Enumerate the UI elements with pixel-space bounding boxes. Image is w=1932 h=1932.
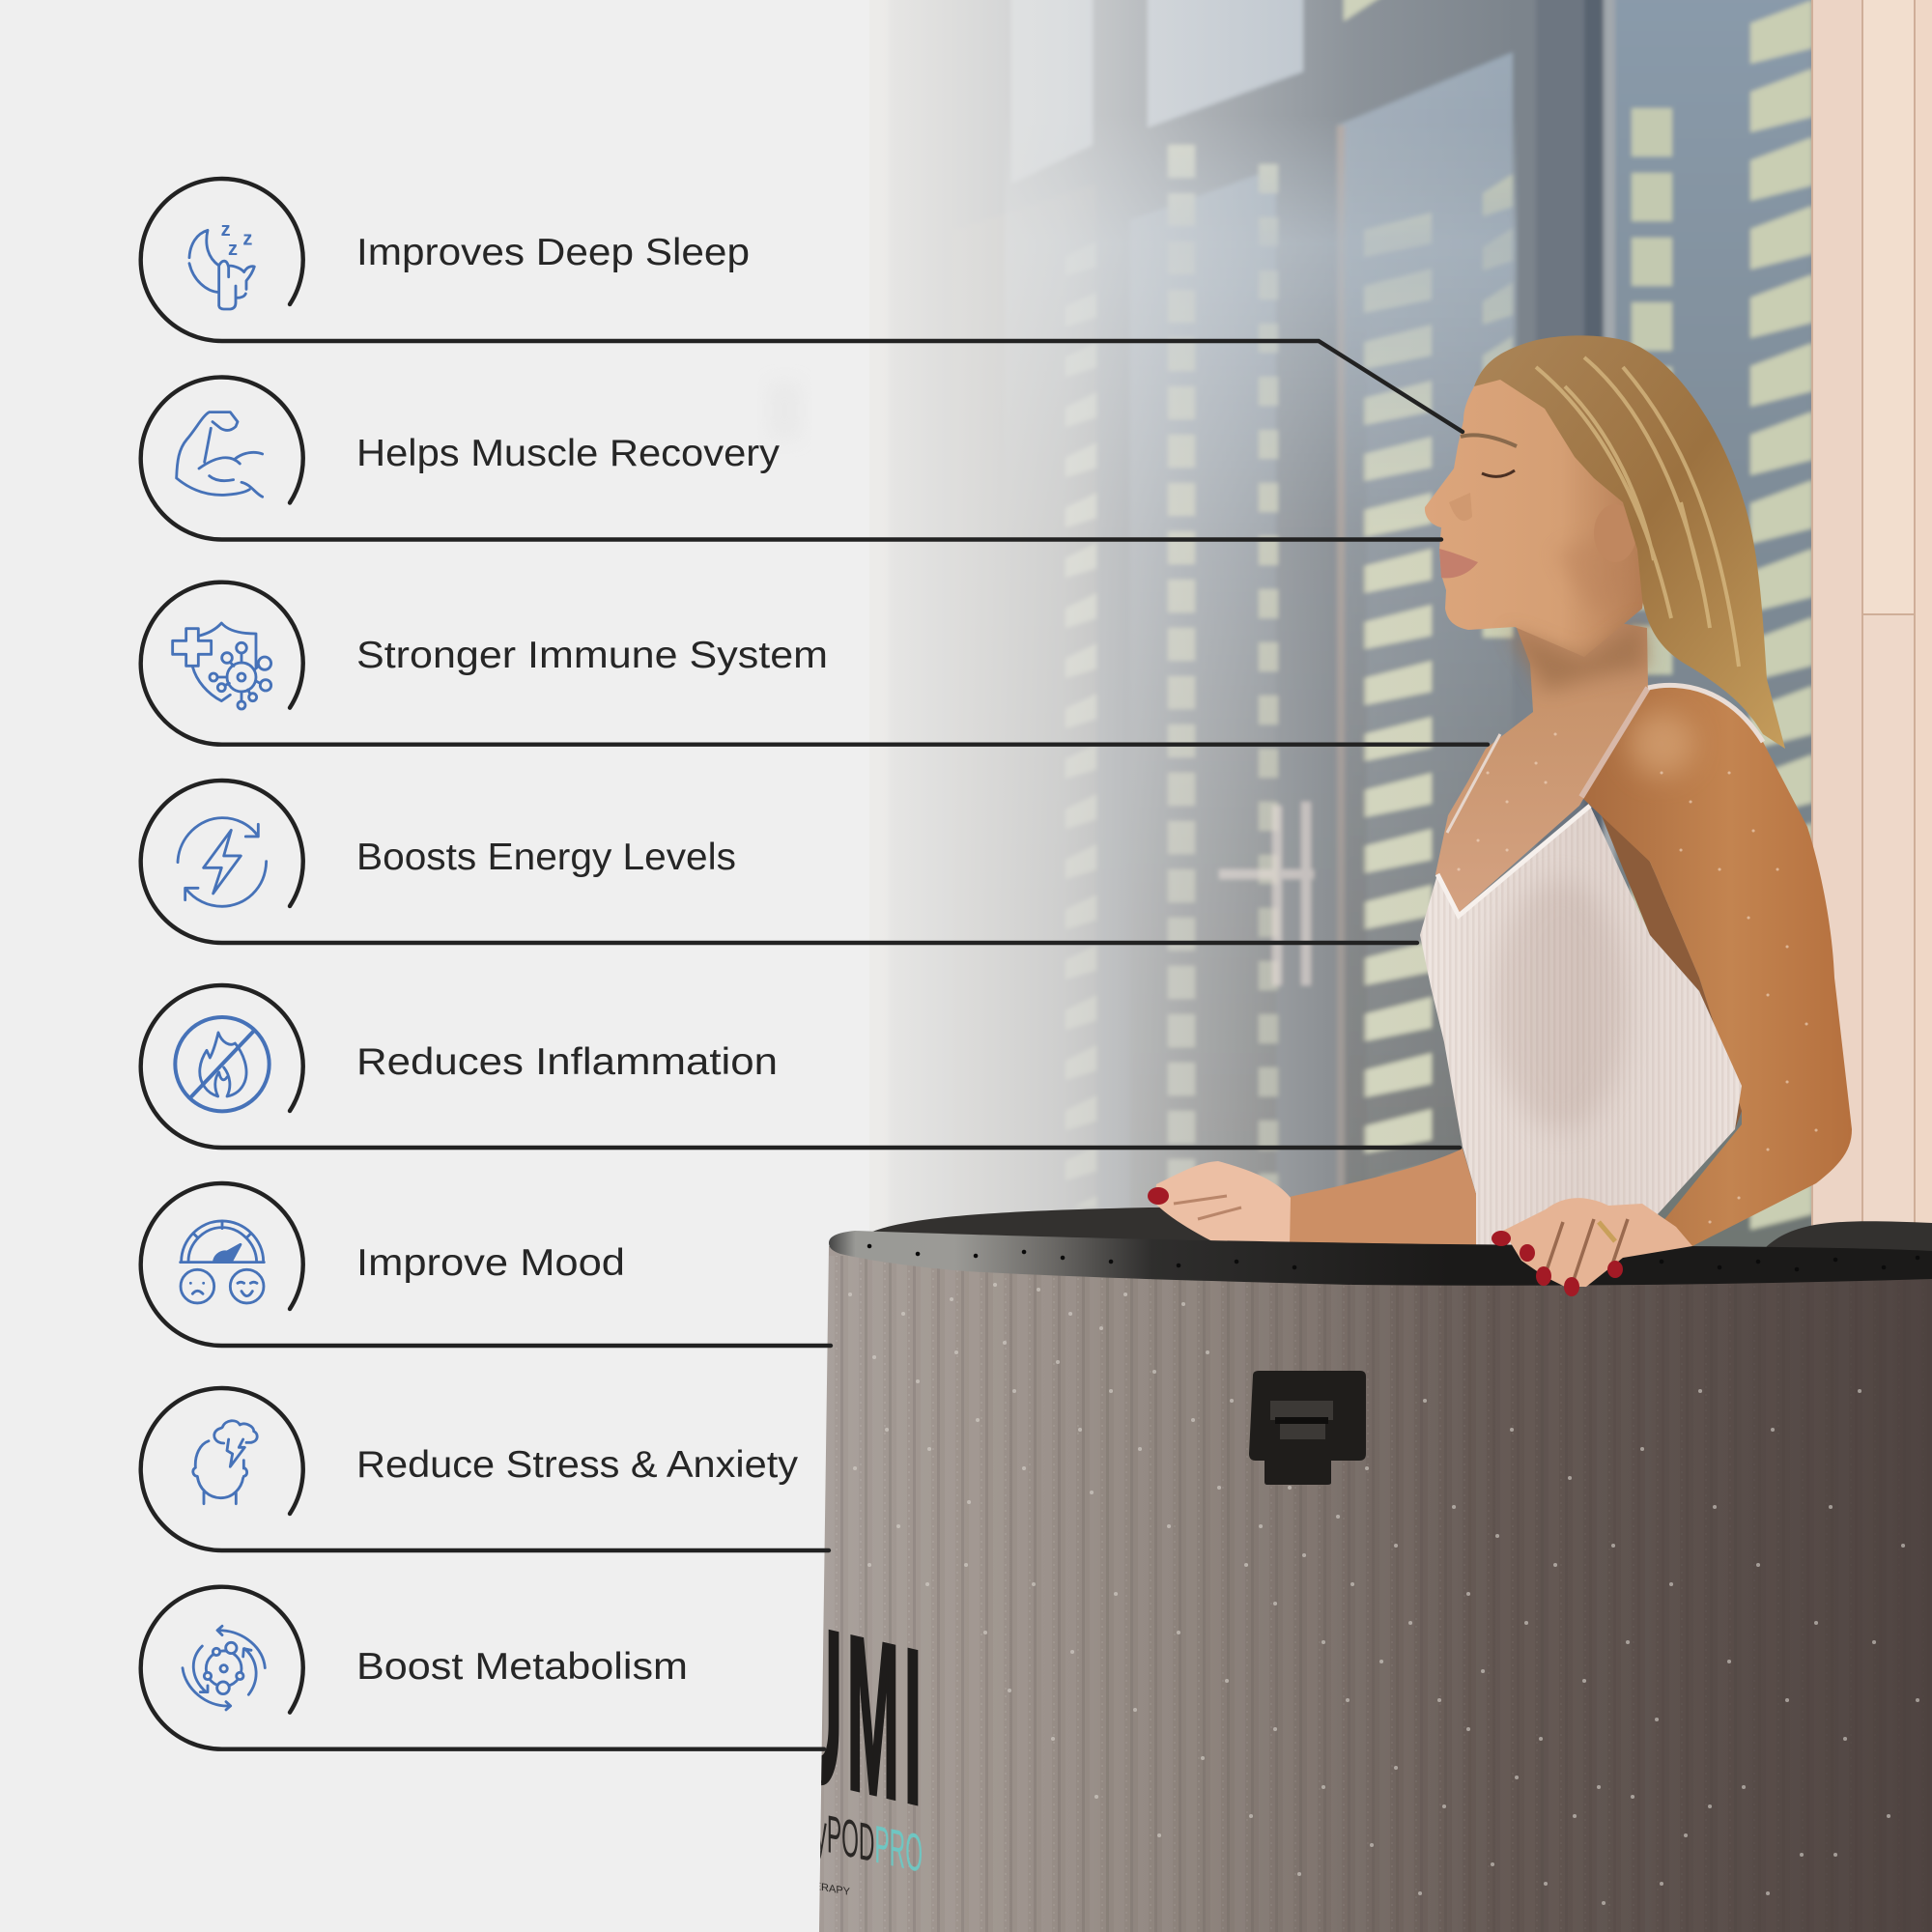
shoulder highlight (1629, 711, 1694, 777)
row: Reduce Stress & Anxiety (141, 1388, 829, 1550)
left hand (1154, 1161, 1291, 1246)
row: Improves Deep Sleep (141, 179, 1463, 432)
row: Reduces Inflammation (141, 985, 1460, 1148)
water droplets (850, 1285, 1918, 1903)
callout line (141, 1388, 829, 1550)
icon: mood gauge (181, 1221, 264, 1303)
woman: right hand on the rim (1492, 1198, 1692, 1296)
cheek shading (1555, 531, 1628, 613)
row: Boost Metabolism (141, 1587, 824, 1749)
upper arm and forearm (1581, 685, 1852, 1246)
eyebrow (1461, 435, 1517, 446)
callout line (141, 582, 1488, 745)
row: Improve Mood (141, 1183, 831, 1346)
ring (1599, 1222, 1615, 1241)
row: Helps Muscle Recovery (141, 378, 1441, 540)
icon: renewable energy bolt (178, 818, 267, 906)
callout line (141, 1183, 831, 1346)
left hand finger shadow (1174, 1196, 1241, 1219)
callout line (141, 378, 1441, 540)
icon: head with storm cloud (193, 1421, 257, 1504)
tub: back rim (850, 1208, 1932, 1256)
skin droplets (1352, 734, 1816, 1227)
label: Stronger Immune System (356, 635, 828, 676)
label: Helps Muscle Recovery (356, 433, 781, 474)
tub: front rim (829, 1231, 1932, 1286)
label: Reduces Inflammation (356, 1041, 778, 1083)
callout line (141, 1587, 824, 1749)
brand name: LUMI (753, 1566, 926, 1853)
background: wooden wall panels (1812, 0, 1932, 1256)
icon: metabolism cycle (183, 1626, 265, 1710)
dress strap (1581, 688, 1648, 797)
lips (1439, 549, 1478, 578)
jaw shadow on neck (1507, 618, 1647, 691)
small tagline: COLD THERAPY (768, 1872, 851, 1898)
tub: handle (1249, 1371, 1366, 1485)
background: faint hook shadow (768, 382, 802, 440)
callout line (141, 985, 1460, 1148)
icon: sleeping moon (189, 219, 254, 309)
label: Improves Deep Sleep (356, 232, 750, 273)
label: Reduce Stress & Anxiety (356, 1444, 799, 1486)
label: Boost Metabolism (356, 1646, 688, 1688)
icon: sleeping moon: z (221, 219, 231, 241)
nose shade (1449, 493, 1472, 521)
icon: flexed arm (177, 412, 263, 497)
face (1425, 372, 1652, 657)
icon: shield with cross and virus (173, 623, 271, 709)
tub ribs (836, 1256, 1586, 1932)
back skin in shadow (1594, 797, 1742, 1129)
left hand nail (1148, 1187, 1169, 1205)
icon: sleeping moon: z (242, 228, 252, 249)
icon: no flame (175, 1017, 270, 1111)
tub lettering (819, 1629, 922, 1895)
product name: recoveryPODPRO (742, 1786, 923, 1884)
background: window scene (889, 0, 1816, 1256)
callout line (141, 781, 1417, 943)
icon: sleeping moon: z (228, 239, 238, 260)
chest and neck (1435, 618, 1648, 913)
dress (1420, 806, 1742, 1251)
rim droplets (869, 1246, 1918, 1269)
left forearm (1273, 1149, 1476, 1246)
row: Boosts Energy Levels (141, 781, 1417, 943)
hair (1474, 335, 1785, 749)
near strap (1447, 734, 1500, 833)
nails (1492, 1231, 1511, 1246)
woman (1148, 335, 1852, 1251)
label: Boosts Energy Levels (356, 837, 736, 878)
ear (1594, 504, 1636, 562)
closed eye (1482, 470, 1515, 476)
callout line (141, 179, 1463, 432)
tub: body (742, 1246, 1932, 1932)
hair strands (1536, 357, 1739, 667)
row: Stronger Immune System (141, 582, 1488, 745)
label: Improve Mood (356, 1242, 625, 1284)
background: white fade over window (869, 0, 1526, 1256)
